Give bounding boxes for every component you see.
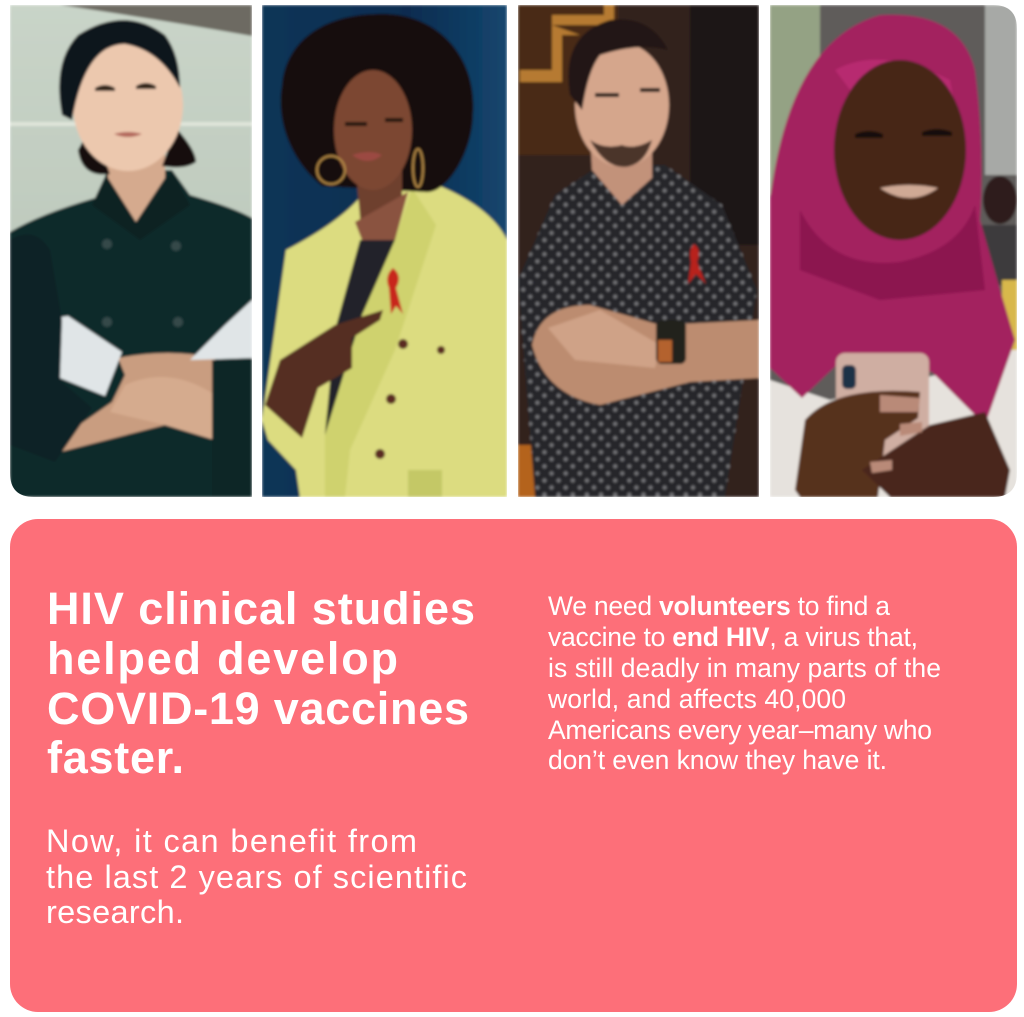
- heading: faster.: [47, 732, 184, 783]
- subheading: Now, it can benefit from: [46, 823, 417, 859]
- heading: helped develop: [47, 633, 398, 684]
- heading: [47, 583, 475, 783]
- subheading: research.: [46, 894, 184, 930]
- body paragraph: is still deadly in many parts of the: [548, 653, 941, 683]
- body paragraph: world, and affects 40,000: [547, 684, 846, 714]
- body paragraph: Americans every year–many who: [548, 715, 932, 745]
- body paragraph: don’t even know they have it.: [548, 745, 887, 775]
- heading: COVID-19 vaccines: [47, 683, 469, 734]
- body paragraph: vaccine to end HIV, a virus that,: [548, 622, 918, 652]
- photo: woman in yellow blazer: [262, 5, 507, 497]
- photo: chef with crossed arms: [10, 5, 252, 497]
- body paragraph: [547, 591, 941, 775]
- subheading: the last 2 years of scientific: [46, 859, 467, 895]
- panel: coral text panel: [10, 519, 1017, 1012]
- subheading: [46, 823, 467, 930]
- photo: woman in magenta hijab with phone: [770, 5, 1017, 497]
- heading: HIV clinical studies: [47, 583, 475, 634]
- body paragraph: We need volunteers to find a: [548, 591, 890, 621]
- photo: man in patterned shirt: [518, 5, 759, 497]
